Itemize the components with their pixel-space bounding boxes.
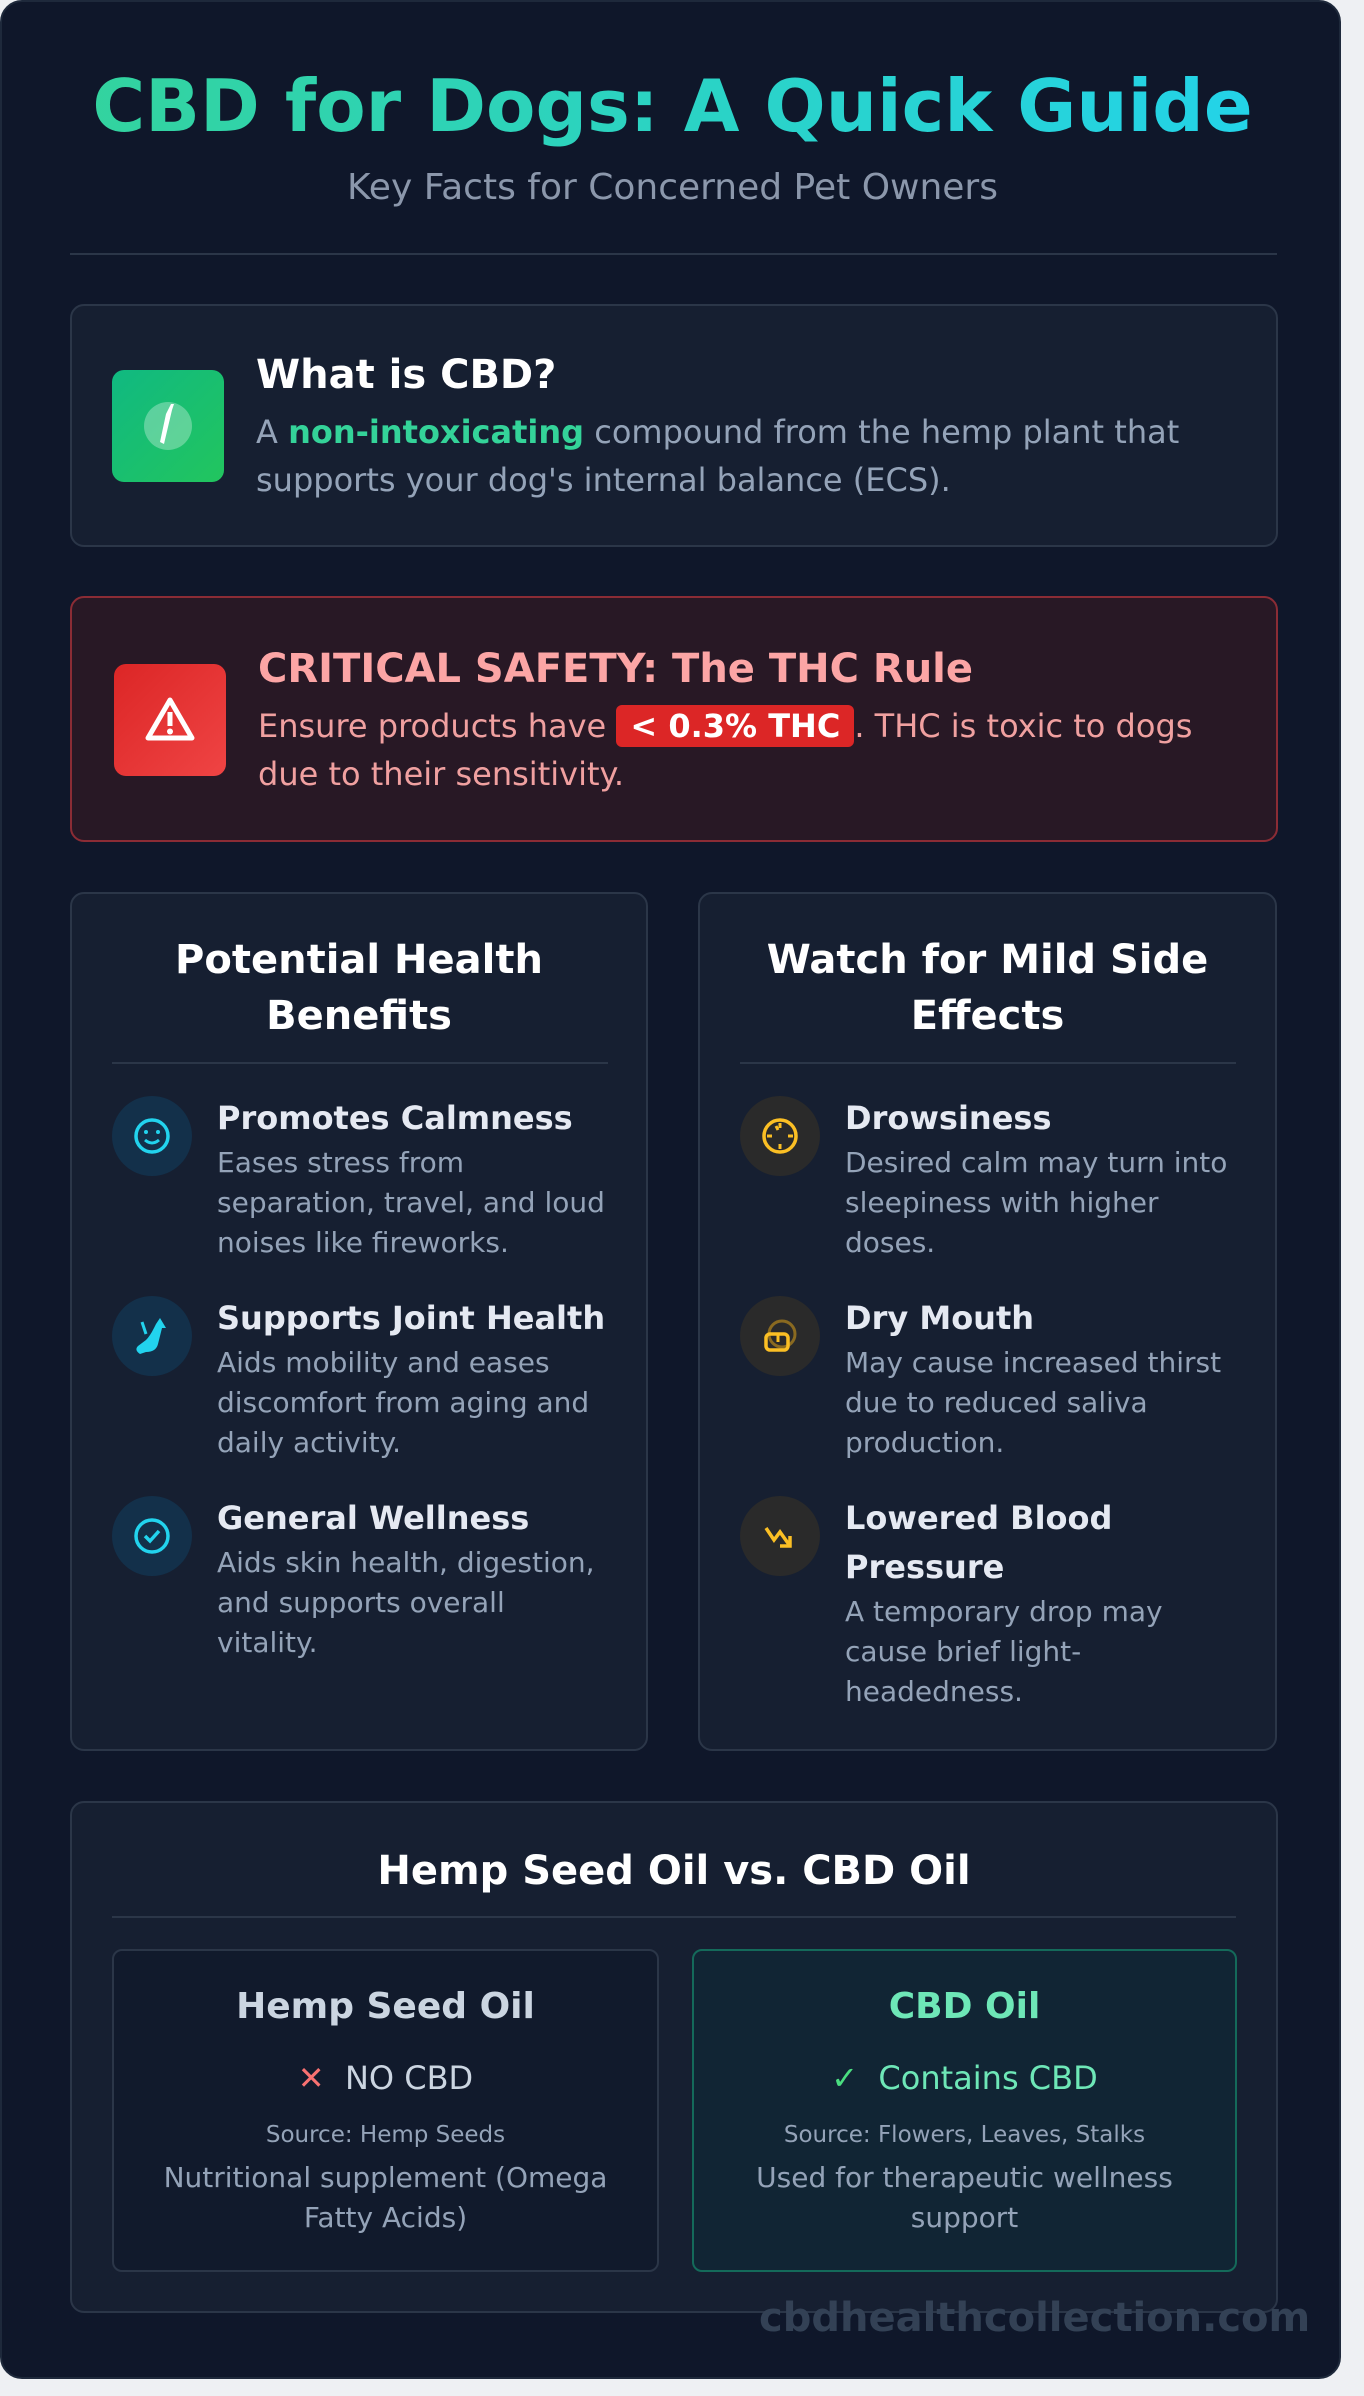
heading: Watch for Mild Side bbox=[767, 937, 1208, 983]
item: dry mouth: Dry Mouth bbox=[845, 1299, 1034, 1337]
icon: clock bbox=[740, 1096, 820, 1176]
title: CBD for Dogs: A Quick Guide bbox=[92, 64, 1253, 148]
panel: safety warning bbox=[70, 596, 1278, 842]
panel: benefits bbox=[70, 892, 648, 1751]
panel: what is CBD bbox=[70, 304, 1278, 547]
item: blood pressure: A temporary drop may cause brief light-headedness. bbox=[845, 1595, 1163, 1708]
heading bbox=[767, 937, 1208, 1039]
item: blood pressure: Lowered Blood Pressure bbox=[845, 1499, 1112, 1586]
heading: Hemp Seed Oil vs. CBD Oil bbox=[377, 1848, 971, 1894]
item: wellness: General Wellness bbox=[217, 1499, 529, 1537]
heading: Benefits bbox=[266, 993, 452, 1039]
heading: Potential Health bbox=[175, 937, 543, 983]
item: calmness bbox=[112, 1096, 605, 1259]
heading: CRITICAL SAFETY: The THC Rule bbox=[258, 646, 973, 692]
icon: trend down bbox=[740, 1496, 820, 1576]
text: Ensure products have < 0.3% THC . THC is toxic to dogs due to their sensitivity. bbox=[258, 707, 1192, 793]
item: calmness: Eases stress from separation, travel, and loud noises like fireworks. bbox=[217, 1146, 605, 1259]
item: drowsiness: Desired calm may turn into sleepiness with higher doses. bbox=[845, 1146, 1227, 1259]
box: cbd oil bbox=[692, 1949, 1237, 2272]
watermark: cbdhealthcollection.com bbox=[759, 2295, 1310, 2341]
item: joint: Aids mobility and eases discomfort from aging and daily activity. bbox=[217, 1346, 589, 1459]
box: cbd oil: CBD Oil bbox=[889, 1986, 1040, 2027]
item: drowsiness: Drowsiness bbox=[845, 1099, 1051, 1137]
icon: cup bbox=[740, 1296, 820, 1376]
item: blood pressure bbox=[740, 1496, 1163, 1708]
item: calmness: Promotes Calmness bbox=[217, 1099, 573, 1137]
text: A non-intoxicating compound from the hemp plant that supports your dog's internal balance (ECS). bbox=[256, 413, 1179, 499]
heading: Effects bbox=[911, 993, 1064, 1039]
item: dry mouth: May cause increased thirst due to reduced saliva production. bbox=[845, 1346, 1221, 1459]
item: joint bbox=[112, 1296, 605, 1459]
panel: comparison bbox=[70, 1801, 1278, 2313]
icon: smile bbox=[112, 1096, 192, 1176]
heading bbox=[175, 937, 543, 1039]
box: cbd oil: Used for therapeutic wellness support bbox=[756, 2161, 1173, 2234]
subtitle: Key Facts for Concerned Pet Owners bbox=[347, 167, 998, 208]
box: cbd oil: ✓ Contains CBD bbox=[831, 2059, 1098, 2097]
icon: warning bbox=[114, 664, 226, 776]
item: wellness bbox=[112, 1496, 595, 1659]
icon: check circle bbox=[112, 1496, 192, 1576]
icon: leaf bbox=[112, 370, 224, 482]
box: hemp seed oil: ✕ NO CBD bbox=[298, 2059, 473, 2097]
box: cbd oil: Source: Flowers, Leaves, Stalks bbox=[784, 2122, 1145, 2148]
item: drowsiness bbox=[740, 1096, 1227, 1259]
item: wellness: Aids skin health, digestion, and supports overall vitality. bbox=[217, 1546, 595, 1659]
icon: bone bbox=[112, 1296, 192, 1376]
panel: side effects bbox=[698, 892, 1277, 1751]
box: hemp seed oil: Nutritional supplement (Omega Fatty Acids) bbox=[164, 2161, 607, 2234]
item: joint: Supports Joint Health bbox=[217, 1299, 605, 1337]
box: hemp seed oil bbox=[112, 1949, 659, 2272]
item: dry mouth bbox=[740, 1296, 1221, 1459]
heading: What is CBD? bbox=[256, 352, 556, 398]
box: hemp seed oil: Hemp Seed Oil bbox=[236, 1986, 535, 2027]
box: hemp seed oil: Source: Hemp Seeds bbox=[266, 2122, 505, 2148]
